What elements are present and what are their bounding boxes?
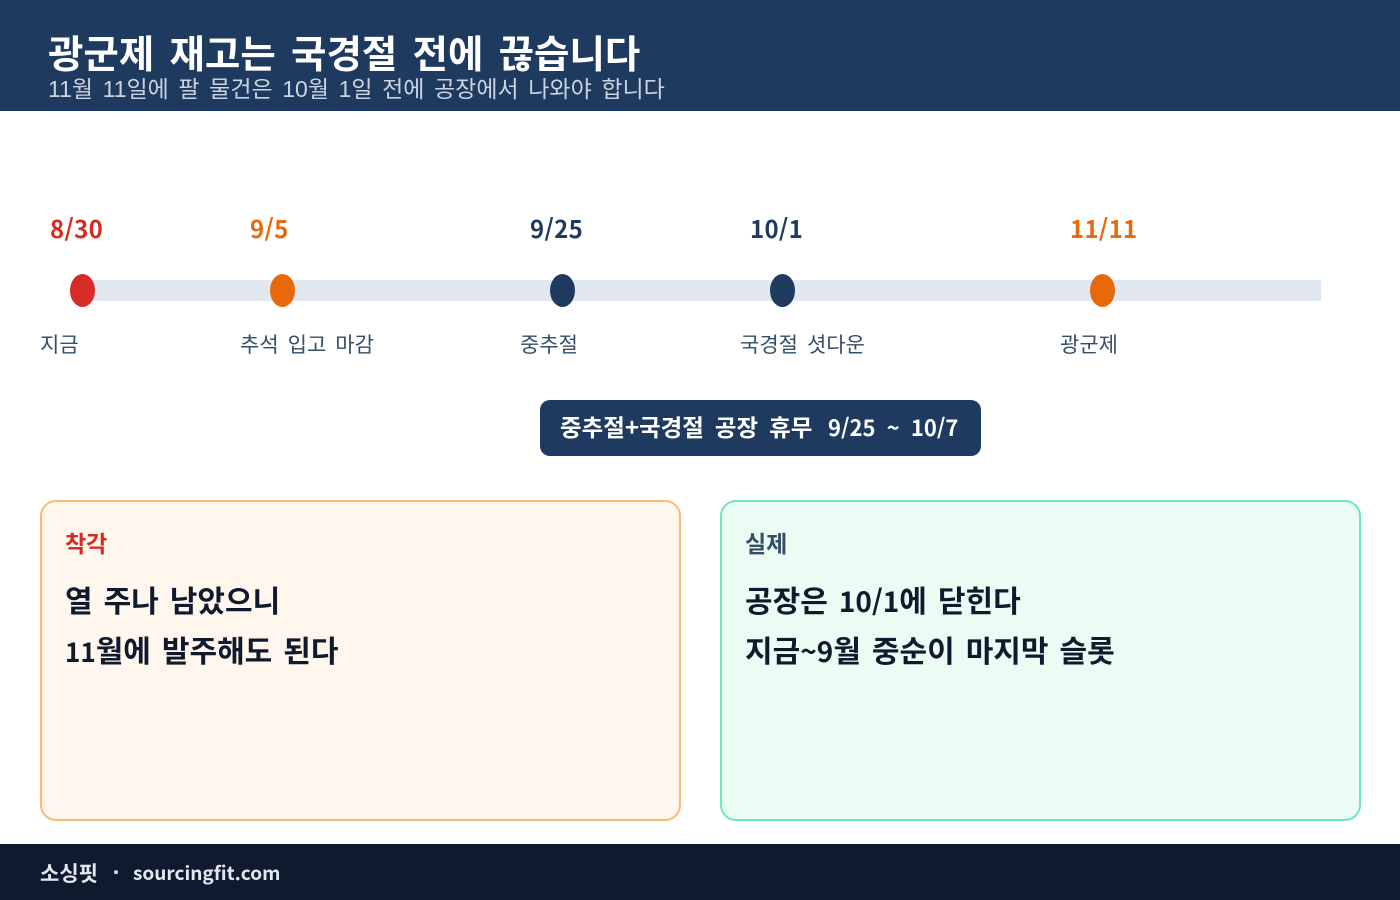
footer separator: · <box>111 863 121 883</box>
footer site address: sourcingfit.com <box>133 859 280 886</box>
timeline event: 11/11: 11/11 <box>1070 210 1138 245</box>
footer <box>0 844 1400 900</box>
factory closure callout: 중추절+국경절 공장 휴무 <box>560 408 812 443</box>
timeline event: 10/1 <box>740 210 865 355</box>
footer brand: 소싱핏 <box>40 863 98 884</box>
timeline event: 9/5 <box>240 210 374 355</box>
panel label: 착각 <box>65 532 107 555</box>
header band <box>0 0 1400 111</box>
timeline event: 9/25 <box>520 210 583 355</box>
timeline event: 10/1: 10/1 <box>750 210 803 245</box>
factory closure callout <box>540 400 981 456</box>
timeline event: 11/11: 광군제 <box>1060 334 1118 355</box>
subtitle: 11월 11일에 팔 물건은 10월 1일 전에 공장에서 나와야 합니다 <box>48 76 665 102</box>
timeline event: 8/30: 지금 <box>40 334 79 355</box>
timeline event: 8/30 <box>40 210 103 355</box>
timeline event: 10/1: 국경절 셧다운 <box>740 334 865 355</box>
timeline track <box>80 280 1321 301</box>
panel statement: 공장은 10/1에 닫힌다 지금~9월 중순이 마지막 슬롯 <box>745 581 1115 671</box>
factory closure callout: 9/25 ~ 10/7 <box>828 411 958 443</box>
panel: reality <box>720 500 1361 821</box>
panel: misconception <box>40 500 681 821</box>
timeline event: 9/5: 추석 입고 마감 <box>240 334 374 355</box>
title: 광군제 재고는 국경절 전에 끊습니다 <box>48 34 640 73</box>
timeline event: 9/25: 중추절 <box>520 334 578 355</box>
timeline event: 9/5: 9/5 <box>250 210 289 245</box>
timeline event: 8/30: 8/30 <box>50 210 103 245</box>
timeline event: 9/25: 9/25 <box>530 210 583 245</box>
timeline event: 11/11 <box>1060 210 1138 355</box>
panel statement: 열 주나 남았으니 11월에 발주해도 된다 <box>65 586 338 670</box>
panel label: 실제 <box>745 532 787 555</box>
